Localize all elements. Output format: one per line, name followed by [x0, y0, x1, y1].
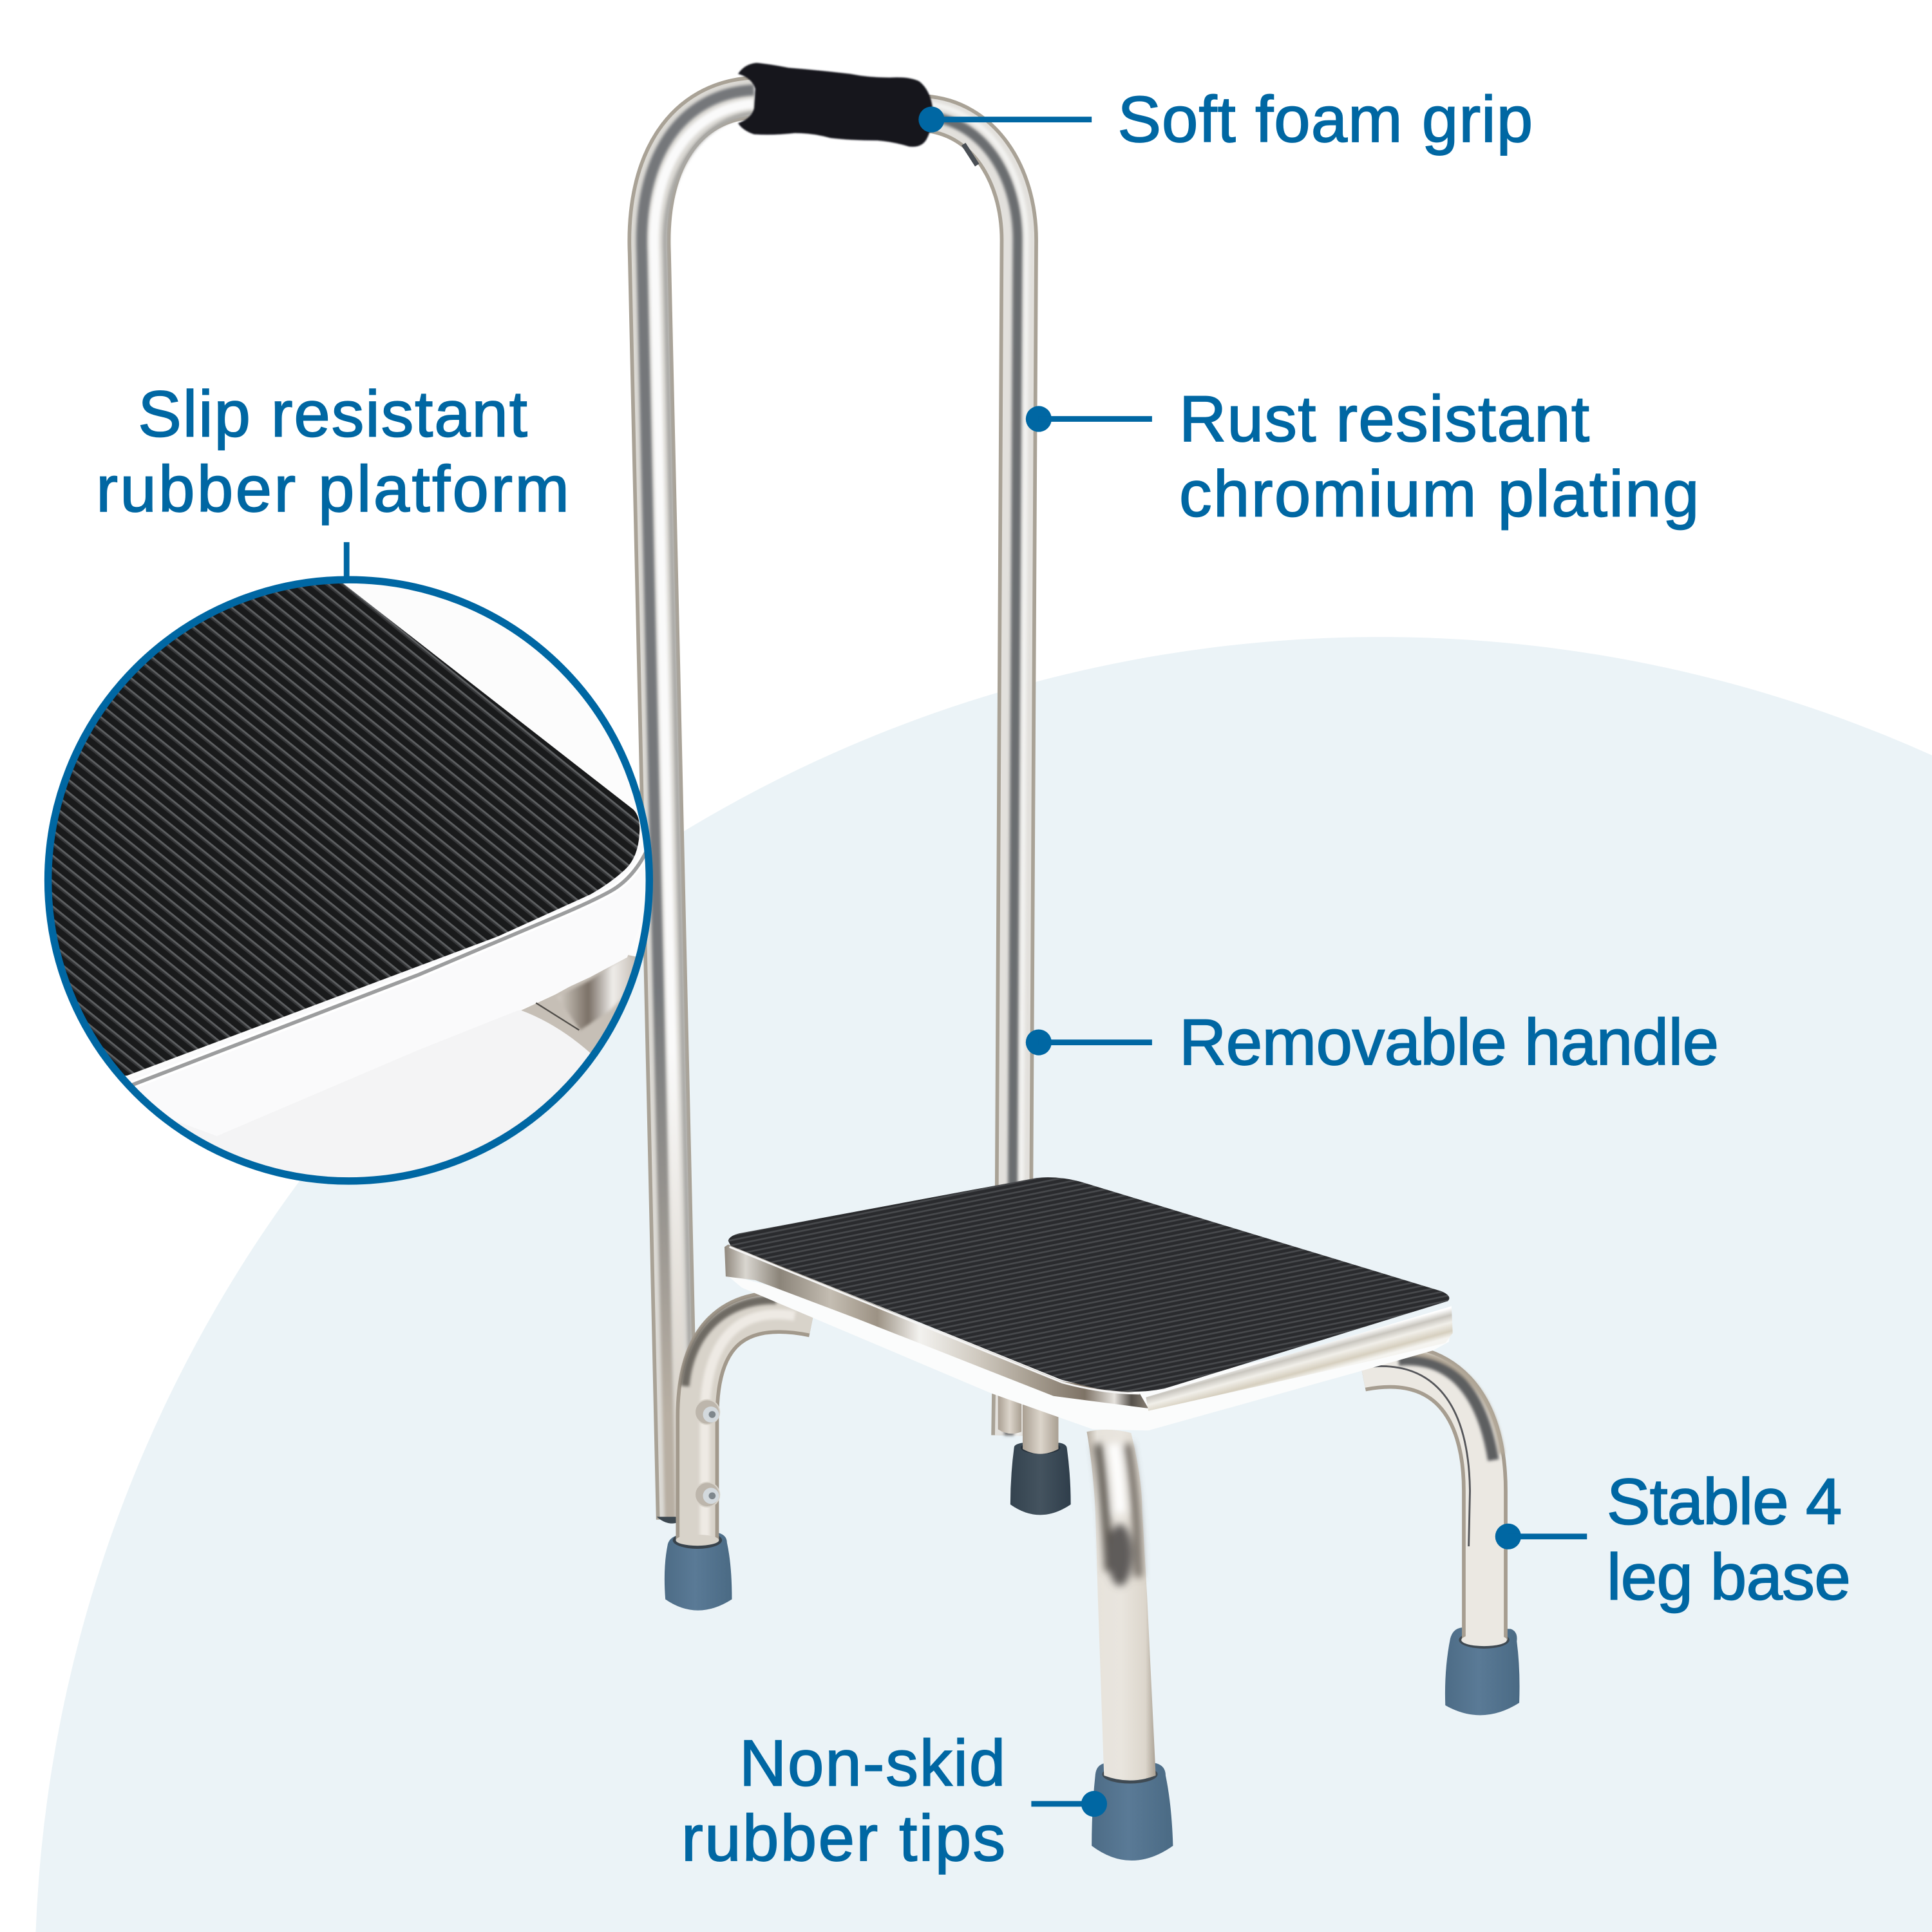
callout: non-skid rubber tips: rubber tips [681, 1802, 1005, 1875]
callout: soft foam grip: Soft foam grip [1117, 83, 1533, 156]
detail inset: ribbed rubber platform close-up [44, 576, 653, 1185]
bolt upper [695, 1399, 719, 1425]
right leg and rubber tip [1361, 1353, 1520, 1715]
callout: removable handle: Removable handle [1179, 1006, 1719, 1079]
callout: slip resistant rubber platform [96, 377, 569, 579]
ribbed rubber surface [52, 583, 640, 1075]
back leg, handle end and rubber tip [998, 1392, 1071, 1515]
background: pale blue arc [35, 637, 1932, 1932]
callout: non-skid rubber tips [681, 1727, 1107, 1875]
callout: rust resistant chromium plating: chromium plating [1179, 458, 1699, 531]
callout: slip resistant rubber platform: rubber platform [96, 453, 569, 526]
chrome tube seen through inset [522, 954, 636, 1053]
callout: rust resistant chromium plating: Rust resistant [1179, 383, 1589, 455]
bolt lower [695, 1482, 719, 1507]
callout: soft foam grip [918, 83, 1533, 156]
lower background inside inset [123, 986, 653, 1232]
chrome line along the platform edge [131, 848, 648, 1086]
white platform edge [569, 954, 629, 987]
callout: rust resistant chromium plating [1026, 383, 1699, 531]
callout: stable 4 leg base: Stable 4 [1607, 1466, 1842, 1539]
left leg with bolts and rubber tip [665, 1300, 813, 1611]
platform rubber surface [728, 1177, 1449, 1392]
platform white underside [726, 1274, 1452, 1430]
handle: chrome tube [641, 90, 1027, 1519]
callout: non-skid rubber tips: Non-skid [739, 1727, 1005, 1799]
callout: slip resistant rubber platform: Slip resistant [138, 377, 527, 450]
platform chrome rim [724, 1244, 1453, 1411]
soft foam grip [738, 63, 933, 147]
step stool with handle [641, 63, 1520, 1861]
callout: stable 4 leg base [1495, 1466, 1851, 1613]
front leg and rubber tip [1087, 1430, 1173, 1861]
callout: stable 4 leg base: leg base [1607, 1540, 1851, 1613]
handle bottom cap [657, 1517, 676, 1524]
